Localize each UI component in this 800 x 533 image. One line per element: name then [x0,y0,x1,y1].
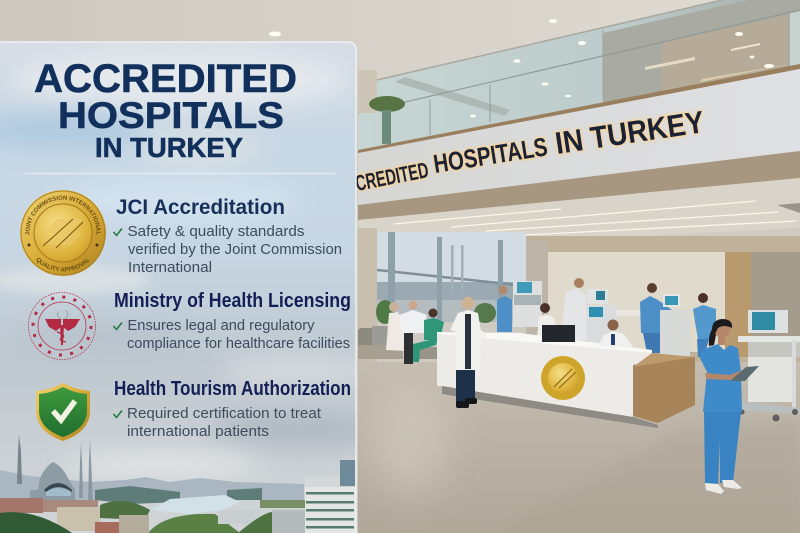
icon: JCI gold seal: QUALITY APPROVAL [36,258,90,272]
gold seal on desk [541,356,585,400]
illuminated sign: CREDITED [353,157,431,196]
equipment centre [587,289,617,343]
section: JCI accreditation: JCI Accreditation [116,196,285,219]
doctor seated centre [399,300,427,364]
monitor station left [513,281,542,327]
upper ceiling [0,0,800,110]
wood rail [358,64,800,155]
title [34,57,297,163]
staff and equipment behind desk [497,278,716,357]
face and hair [714,320,730,338]
illuminated sign: CREDITED [353,157,431,196]
far hills [0,470,304,500]
forested shore [95,486,262,504]
section: Health tourism authorization: international patients [127,423,269,440]
icon: check [114,228,122,236]
panel: accreditation info [0,41,357,533]
illuminated sign: HOSPITALS [431,131,550,179]
scrub top [700,344,742,412]
section: Ministry of Health licensing: Ensures legal and regulatory [128,317,315,334]
icon: Ministry of Health seal [28,292,96,360]
section: JCI accreditation: Safety & quality standards [128,223,304,240]
section: Ministry of Health licensing: Ministry of Health Licensing [114,290,351,312]
window plants [474,303,496,323]
planter [369,96,405,144]
section: Health tourism authorization: Health Tourism Authorization [114,378,351,400]
forearm [705,369,747,380]
icon: check [114,322,122,330]
counter back [616,310,656,316]
blue staff left [497,286,512,332]
mosque [17,435,93,503]
illuminated sign [353,104,707,196]
trousers [704,412,741,484]
section: Health tourism authorization [114,378,351,440]
section: Health tourism authorization: Required certification to treat [127,405,322,422]
seated receptionist [598,320,633,347]
doctor seated left [386,302,406,351]
illuminated sign: IN TURKEY [553,104,707,161]
city blocks and trees [0,498,43,513]
white building [305,487,356,533]
male nurse [640,283,672,353]
pillar lower [358,228,377,365]
reception desk [437,320,695,428]
pillar upper [358,70,377,113]
nurse with tablet [700,319,759,494]
wood beam [358,151,800,220]
water [150,495,240,514]
title: IN TURKEY [95,132,243,163]
sign wall [353,69,800,205]
section: Ministry of Health licensing [114,290,351,352]
medical cart [738,310,800,422]
icon: JCI gold seal [20,190,106,276]
doctor behind desk [562,278,587,340]
icon: green shield [36,383,90,441]
section: JCI accreditation: International [128,259,212,276]
standing doctor [450,296,486,408]
shoes [705,483,724,494]
illuminated sign: HOSPITALS [431,131,550,179]
desk monitor [542,325,575,342]
tower block [340,460,355,486]
patient in green [413,308,444,362]
seated woman [537,303,556,338]
section: JCI accreditation [114,196,342,276]
ponytail [709,328,717,346]
windows with bridge view [377,232,526,323]
seating group [358,300,444,364]
Istanbul skyline [0,435,356,533]
section: Ministry of Health licensing: compliance for healthcare facilities [127,335,350,352]
icon: check [114,410,122,418]
equipment right of nurse [660,294,690,356]
tablet [730,366,759,381]
ceiling lights [269,19,774,118]
divider [25,172,335,174]
section: JCI accreditation: verified by the Joint Commission [128,241,342,258]
icon: JCI gold seal: JOINT COMMISSION INTERNATIONAL [25,195,101,236]
lower ceiling with light strips [358,178,800,242]
title: HOSPITALS [58,95,284,136]
panel border [0,42,356,533]
illuminated sign: IN TURKEY [553,104,707,161]
back wall [526,236,800,366]
plant [376,300,394,324]
upper floor glass gallery [358,0,800,152]
female nurse [693,293,716,357]
panel sky background [0,42,390,533]
floor [358,362,800,533]
title: ACCREDITED [34,57,297,101]
